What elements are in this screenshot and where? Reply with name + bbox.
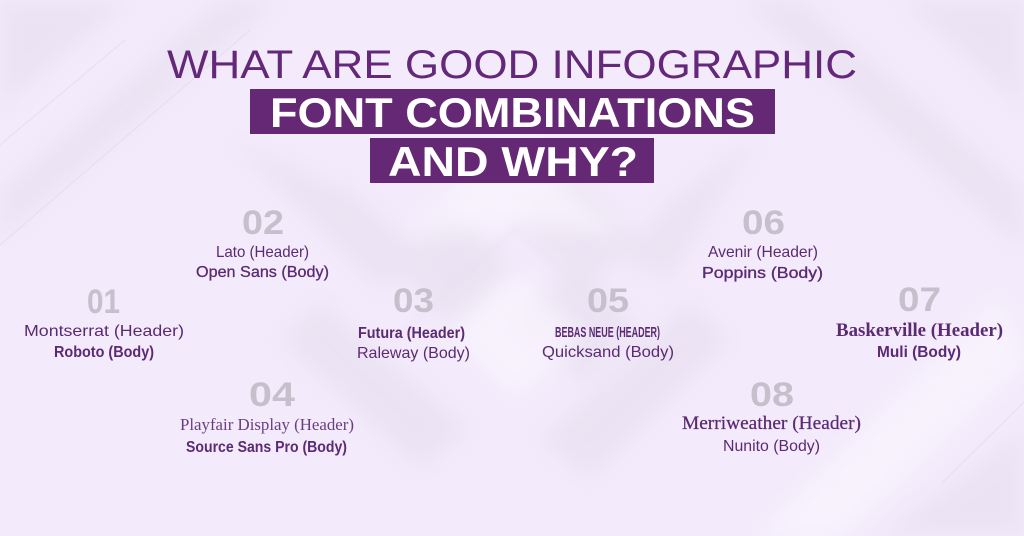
item 01: Montserrat (Header) [24,323,184,340]
item 04: Playfair Display (Header) [180,415,354,434]
item 05: Quicksand (Body) [542,344,674,361]
item 02: 02 [242,204,284,242]
item 02 [196,204,329,281]
item 07: Baskerville (Header) [836,320,1003,341]
item 04 [180,376,354,456]
item 08: 08 [750,376,794,414]
item 03: 03 [393,282,434,320]
title [167,43,857,185]
item 04: 04 [249,376,295,414]
item 08: Merriweather (Header) [682,413,861,434]
item 07 [836,281,1003,361]
item 01: 01 [87,283,120,321]
item 07: Muli (Body) [877,344,961,361]
item 06 [702,204,823,282]
item 07: 07 [898,281,941,319]
item 02: Open Sans (Body) [196,264,329,281]
item 05: BEBAS NEUE (HEADER) [555,324,660,341]
item 03 [357,282,470,362]
item 08: Nunito (Body) [723,438,820,455]
item 03: Raleway (Body) [357,345,470,362]
item 08 [682,376,861,455]
item 02: Lato (Header) [216,244,309,261]
item 06: 06 [742,204,785,242]
highlighted title line two: FONT COMBINATIONS [270,89,755,136]
item 01 [24,283,184,361]
item 03: Futura (Header) [358,325,465,342]
item 05 [542,282,674,361]
item 05: 05 [587,282,629,320]
highlighted title line three: AND WHY? [388,138,638,185]
item 06: Avenir (Header) [708,244,818,261]
item 01: Roboto (Body) [54,344,154,361]
item 06: Poppins (Body) [702,265,823,282]
item 04: Source Sans Pro (Body) [186,439,347,456]
title line one: WHAT ARE GOOD INFOGRAPHIC [167,43,857,87]
